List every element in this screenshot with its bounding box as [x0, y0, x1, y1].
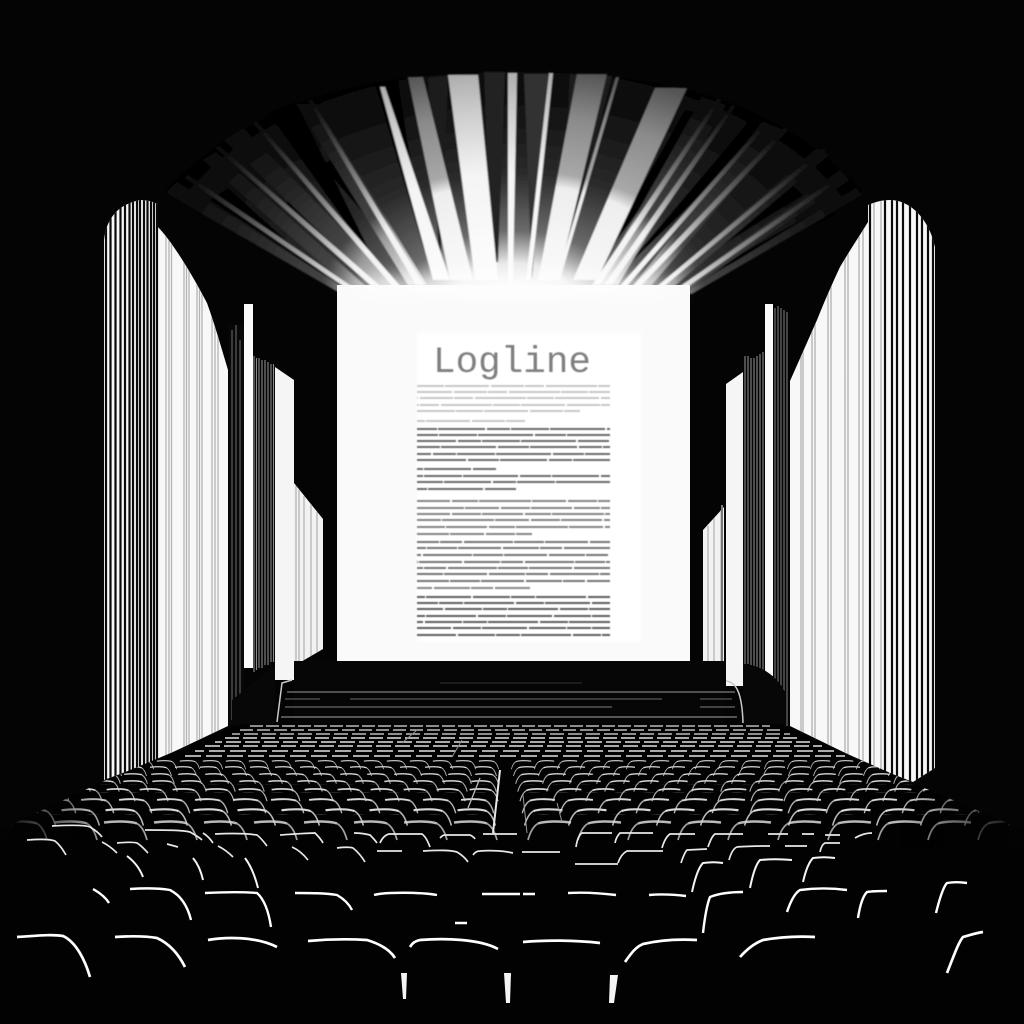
stage and steps [277, 661, 743, 723]
bright rays [380, 73, 553, 282]
white panel [275, 367, 294, 680]
light glow at top of screen [348, 277, 678, 295]
black gaps between rays [210, 72, 835, 288]
blurred body copy [417, 386, 610, 635]
row of seat backs at y 833 [27, 825, 872, 864]
left stair rail [277, 680, 292, 722]
left main curtain [100, 190, 232, 790]
row of seat backs at y 860 [127, 856, 835, 892]
mid seat rows [10, 760, 1010, 840]
right main curtain [788, 190, 938, 790]
title: Logline [433, 342, 591, 384]
armrest highlights [401, 973, 618, 1003]
white bar [244, 304, 253, 668]
ceiling light rays [165, 72, 862, 294]
row of seat backs at y 890 [93, 882, 967, 933]
projection screen [337, 277, 690, 661]
audience seating [0, 724, 1024, 1024]
right stair rail [726, 681, 743, 723]
aisle lines [402, 730, 562, 833]
front row of seat backs [17, 932, 983, 977]
right inner curtain panels [703, 304, 787, 728]
far seat rows [185, 726, 845, 756]
left inner curtain panels [229, 304, 323, 725]
